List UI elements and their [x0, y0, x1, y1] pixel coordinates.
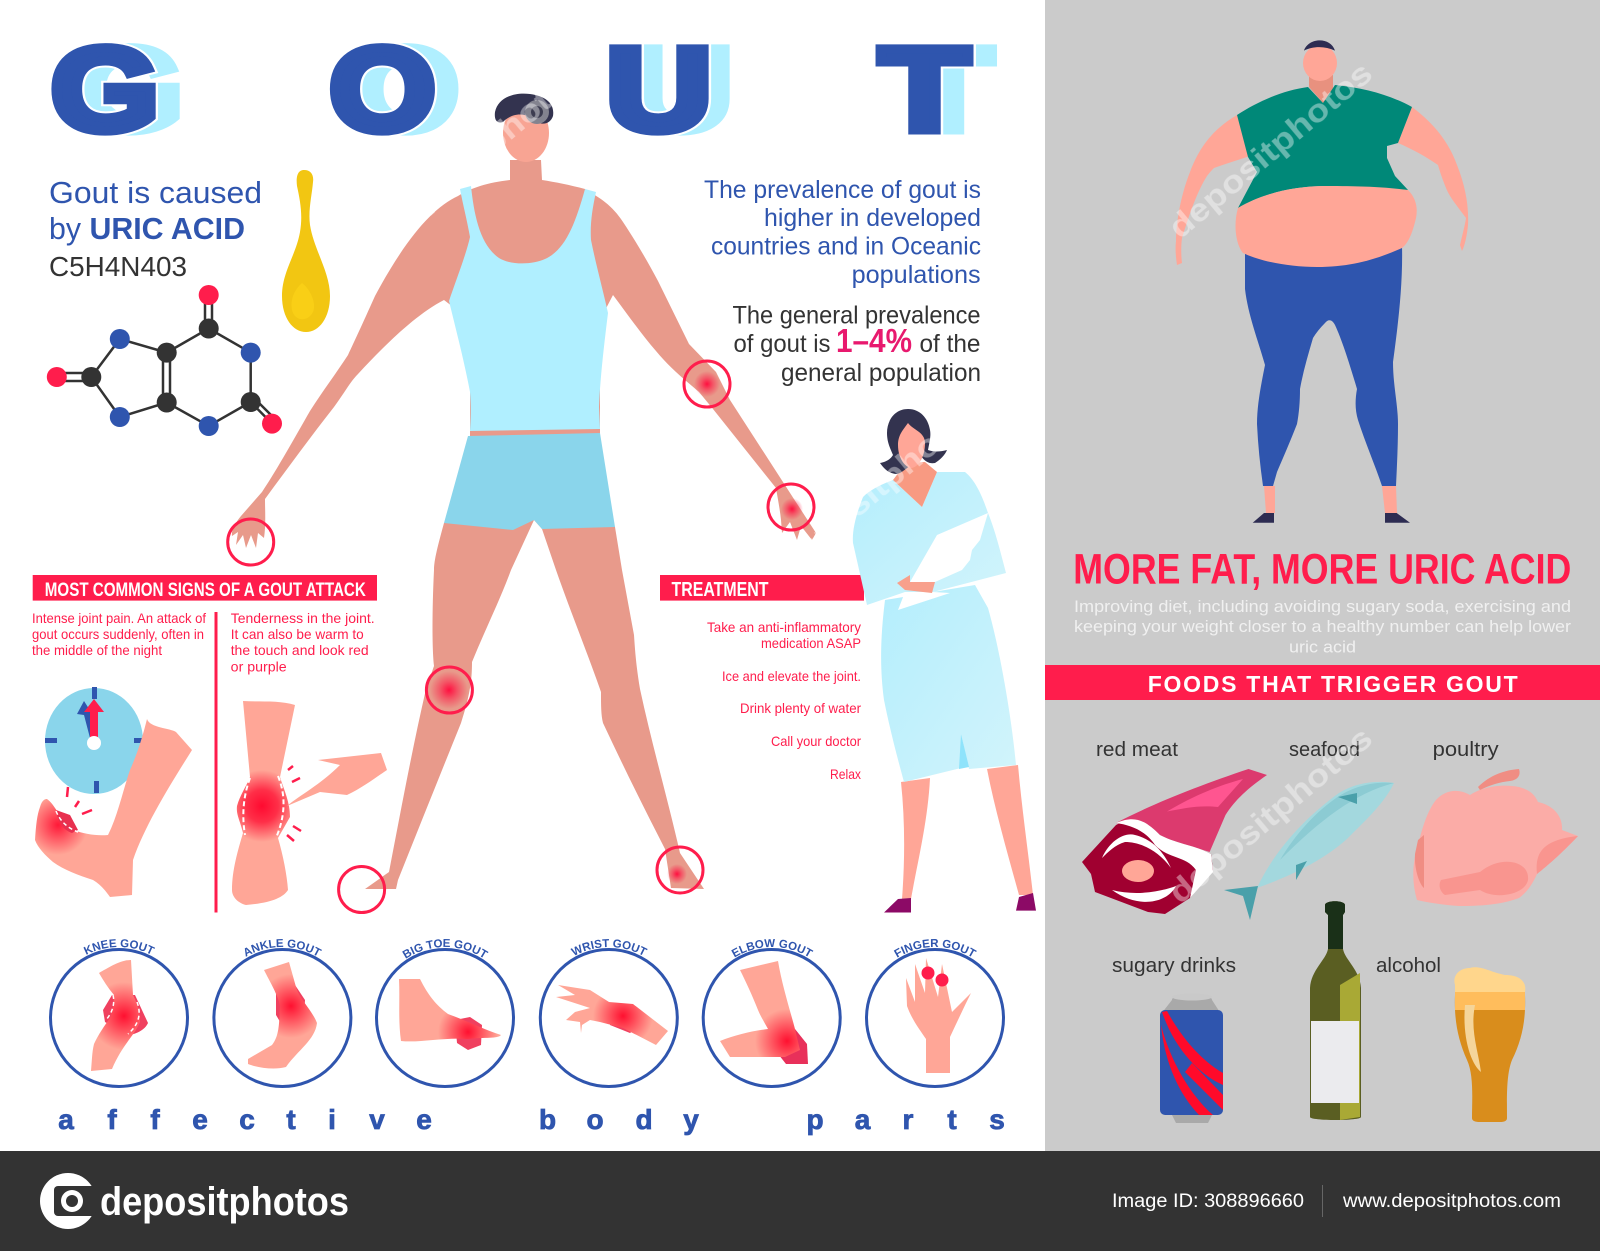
man shorts — [444, 433, 615, 530]
text: intense joint pain: gout occurs suddenly, often in — [32, 626, 204, 642]
text: general prevalence 1-4%: of gout is — [734, 330, 830, 358]
badge: elbow gout: ELBOW GOUT — [731, 939, 814, 958]
title letter U: U — [606, 24, 712, 156]
title letter U: U — [606, 24, 712, 156]
title letter U: U — [627, 24, 733, 156]
text: intense joint pain: the middle of the night — [32, 642, 162, 658]
icon: beer glass — [1454, 967, 1525, 1122]
caption: affective body parts: d — [635, 1104, 653, 1135]
text: prevalence in developed countries: populations — [852, 261, 981, 289]
watermark: depositphotos — [373, 55, 1379, 910]
caption: affective body parts: c — [239, 1104, 255, 1135]
doctor folder — [898, 513, 988, 610]
overweight man shins and shoes — [1253, 486, 1410, 523]
text: tenderness in the joint: or purple — [231, 658, 287, 674]
title letter U — [606, 24, 733, 156]
caption: affective body parts: t — [286, 1104, 296, 1135]
text: treatment list: Drink plenty of water — [740, 700, 861, 716]
text: intense joint pain: Intense joint pain. An attack of — [32, 610, 206, 626]
text: prevalence in developed countries: countries and in Oceanic — [711, 232, 981, 260]
food labels: seafood — [1289, 739, 1360, 761]
food labels — [1096, 739, 1499, 977]
text: diet advice: keeping your weight closer to a healthy number can help lower — [1074, 617, 1571, 636]
logo wordmark: depositphotos — [100, 1180, 349, 1224]
logo camera icon — [40, 1173, 96, 1229]
illustration: foot with night pain — [35, 719, 192, 897]
title letter O: O — [353, 24, 459, 156]
caption: affective body parts: v — [369, 1104, 385, 1135]
text: treatment list — [707, 619, 861, 782]
text: treatment list: medication ASAP — [761, 635, 861, 651]
caption: affective body parts: i — [328, 1104, 336, 1135]
illustration: doctor — [853, 409, 1036, 912]
badge: elbow gout — [702, 939, 842, 1088]
text: uric acid cause: Gout is caused — [49, 175, 262, 210]
title letter T: T — [880, 24, 970, 156]
text: general prevalence 1-4%: of the — [920, 330, 980, 358]
badge: big toe gout: BIG TOE GOUT — [402, 939, 488, 958]
man hair — [495, 94, 553, 124]
joint marker circles — [228, 361, 814, 912]
text: general prevalence 1-4%: general population — [781, 359, 981, 387]
banner: foods that trigger gout — [1045, 665, 1600, 700]
text: tenderness in the joint — [231, 610, 375, 674]
panel: most common signs heading — [33, 575, 377, 601]
doctor hair — [880, 409, 947, 474]
text: intense joint pain — [32, 610, 206, 658]
title letter G: G — [75, 24, 183, 156]
overweight man belly — [1236, 186, 1417, 267]
text: tenderness in the joint: the touch and look red — [231, 642, 369, 658]
illustration: pointing hand — [287, 753, 387, 806]
doctor face — [898, 423, 925, 468]
man head — [503, 104, 549, 162]
badge: finger gout: FINGER GOUT — [894, 939, 977, 958]
doctor coat skirt — [881, 585, 1016, 782]
badge: knee gout — [49, 939, 189, 1088]
title letter G: G — [51, 24, 159, 156]
title letter T: T — [903, 24, 993, 156]
website: www.depositphotos.com — [1342, 1191, 1561, 1212]
text: treatment list: Relax — [830, 766, 861, 782]
title letter O: O — [330, 24, 436, 156]
title letter O: O — [330, 24, 436, 156]
text: uric acid cause: by URIC ACID — [49, 211, 245, 246]
title letter T: T — [880, 24, 970, 156]
doctor legs — [901, 765, 1033, 899]
section: affected body part circles — [49, 939, 1005, 1088]
text: uric acid cause — [49, 175, 262, 282]
doctor coat upper — [853, 472, 1006, 605]
food labels: red meat — [1096, 739, 1178, 761]
text: uric acid cause: C5H4N403 — [49, 251, 187, 282]
icon: uric acid drop — [282, 170, 330, 332]
illustration: man with gout joints — [228, 94, 816, 913]
caption: affective body parts: f — [107, 1104, 117, 1135]
doctor neck and chest — [893, 462, 937, 507]
watermark ring on head — [525, 100, 549, 124]
caption: affective body parts: y — [683, 1104, 699, 1135]
illustration: overweight man — [1176, 40, 1468, 523]
overweight man trousers — [1245, 245, 1402, 486]
title letter T — [880, 24, 993, 156]
panel: most common signs heading: MOST COMMON SIGNS OF A GOUT ATTACK — [45, 580, 366, 601]
food labels: sugary drinks — [1112, 955, 1236, 977]
caption: affective body parts: e — [192, 1104, 208, 1135]
caption: affective body parts: e — [416, 1104, 432, 1135]
hot spots on joints — [430, 371, 803, 884]
text: tenderness in the joint: It can also be warm to — [231, 626, 364, 642]
badge: knee gout: KNEE GOUT — [84, 939, 155, 955]
icon: fish — [1224, 782, 1394, 920]
illustration: swollen ankle front — [232, 701, 301, 905]
badge: wrist gout: WRIST GOUT — [570, 939, 648, 956]
caption: affective body parts: b — [539, 1104, 556, 1135]
doctor shoes — [884, 893, 1036, 912]
footer bar — [0, 1151, 1600, 1251]
text: diet advice: uric acid — [1289, 638, 1356, 657]
title letter G: G — [51, 24, 159, 156]
text: general prevalence 1-4% — [732, 302, 981, 387]
image id: Image ID: 308896660 — [1112, 1191, 1304, 1212]
icon: soda can — [1160, 994, 1223, 1123]
badge: ankle gout: ANKLE GOUT — [244, 939, 322, 957]
text: treatment list: Take an anti-inflammatory — [707, 619, 861, 635]
text: treatment list: Call your doctor — [771, 733, 861, 749]
overweight man head and neck — [1303, 40, 1337, 103]
food labels: poultry — [1433, 739, 1499, 761]
grey right panel background — [1045, 0, 1600, 1151]
text: diet advice — [1074, 597, 1571, 657]
man body skin — [232, 160, 816, 889]
watermark: depositphotos: depositphotos — [771, 390, 989, 580]
badge: big toe gout — [375, 939, 515, 1088]
caption: affective body parts: o — [586, 1104, 604, 1135]
watermark: depositphotos: depositphotos — [373, 55, 591, 245]
badge: wrist gout — [538, 939, 679, 1088]
text: prevalence in developed countries: higher in developed — [764, 204, 981, 232]
doctor hand — [897, 575, 935, 593]
text: prevalence in developed countries — [704, 176, 981, 289]
title: GOUT — [51, 24, 993, 156]
white left panel background — [0, 0, 1045, 1151]
overweight man arms — [1176, 107, 1468, 265]
watermark: depositphotos: depositphotos — [1161, 55, 1379, 245]
caption: affective body parts: f — [150, 1104, 160, 1135]
man tank top — [449, 186, 608, 431]
text: diet advice: Improving diet, including avoiding sugary soda, exercising and — [1074, 597, 1571, 616]
overweight man t-shirt — [1237, 85, 1412, 208]
caption: affective body parts: s — [989, 1104, 1005, 1135]
molecule diagram — [47, 285, 282, 436]
text: general prevalence 1-4%: The general prevalence — [732, 302, 980, 330]
caption: affective body parts: a — [855, 1104, 871, 1135]
icon: red meat — [1082, 769, 1267, 914]
food labels: alcohol — [1376, 955, 1441, 977]
panel: treatment heading: TREATMENT — [672, 579, 768, 601]
text: general prevalence 1-4%: 1–4% — [836, 322, 912, 359]
text: treatment list: Ice and elevate the joint. — [722, 668, 861, 684]
badge: ankle gout — [212, 939, 352, 1088]
text: tenderness in the joint: Tenderness in the joint. — [231, 610, 375, 626]
title letter G — [51, 24, 183, 156]
caption: affective body parts: r — [903, 1104, 914, 1135]
icon: night clock — [45, 687, 144, 794]
banner: foods that trigger gout: FOODS THAT TRIGGER GOUT — [1148, 671, 1518, 697]
panel: treatment heading — [660, 575, 864, 601]
caption: affective body parts: a — [58, 1104, 74, 1135]
text: prevalence in developed countries: The prevalence of gout is — [704, 176, 981, 204]
caption: affective body parts: p — [806, 1104, 824, 1135]
icon: poultry — [1413, 769, 1578, 906]
badge: finger gout — [865, 939, 1005, 1088]
caption: affective body parts: t — [947, 1104, 957, 1135]
watermark: depositphotos: depositphotos — [1161, 720, 1379, 910]
icon: wine bottle — [1310, 901, 1361, 1120]
